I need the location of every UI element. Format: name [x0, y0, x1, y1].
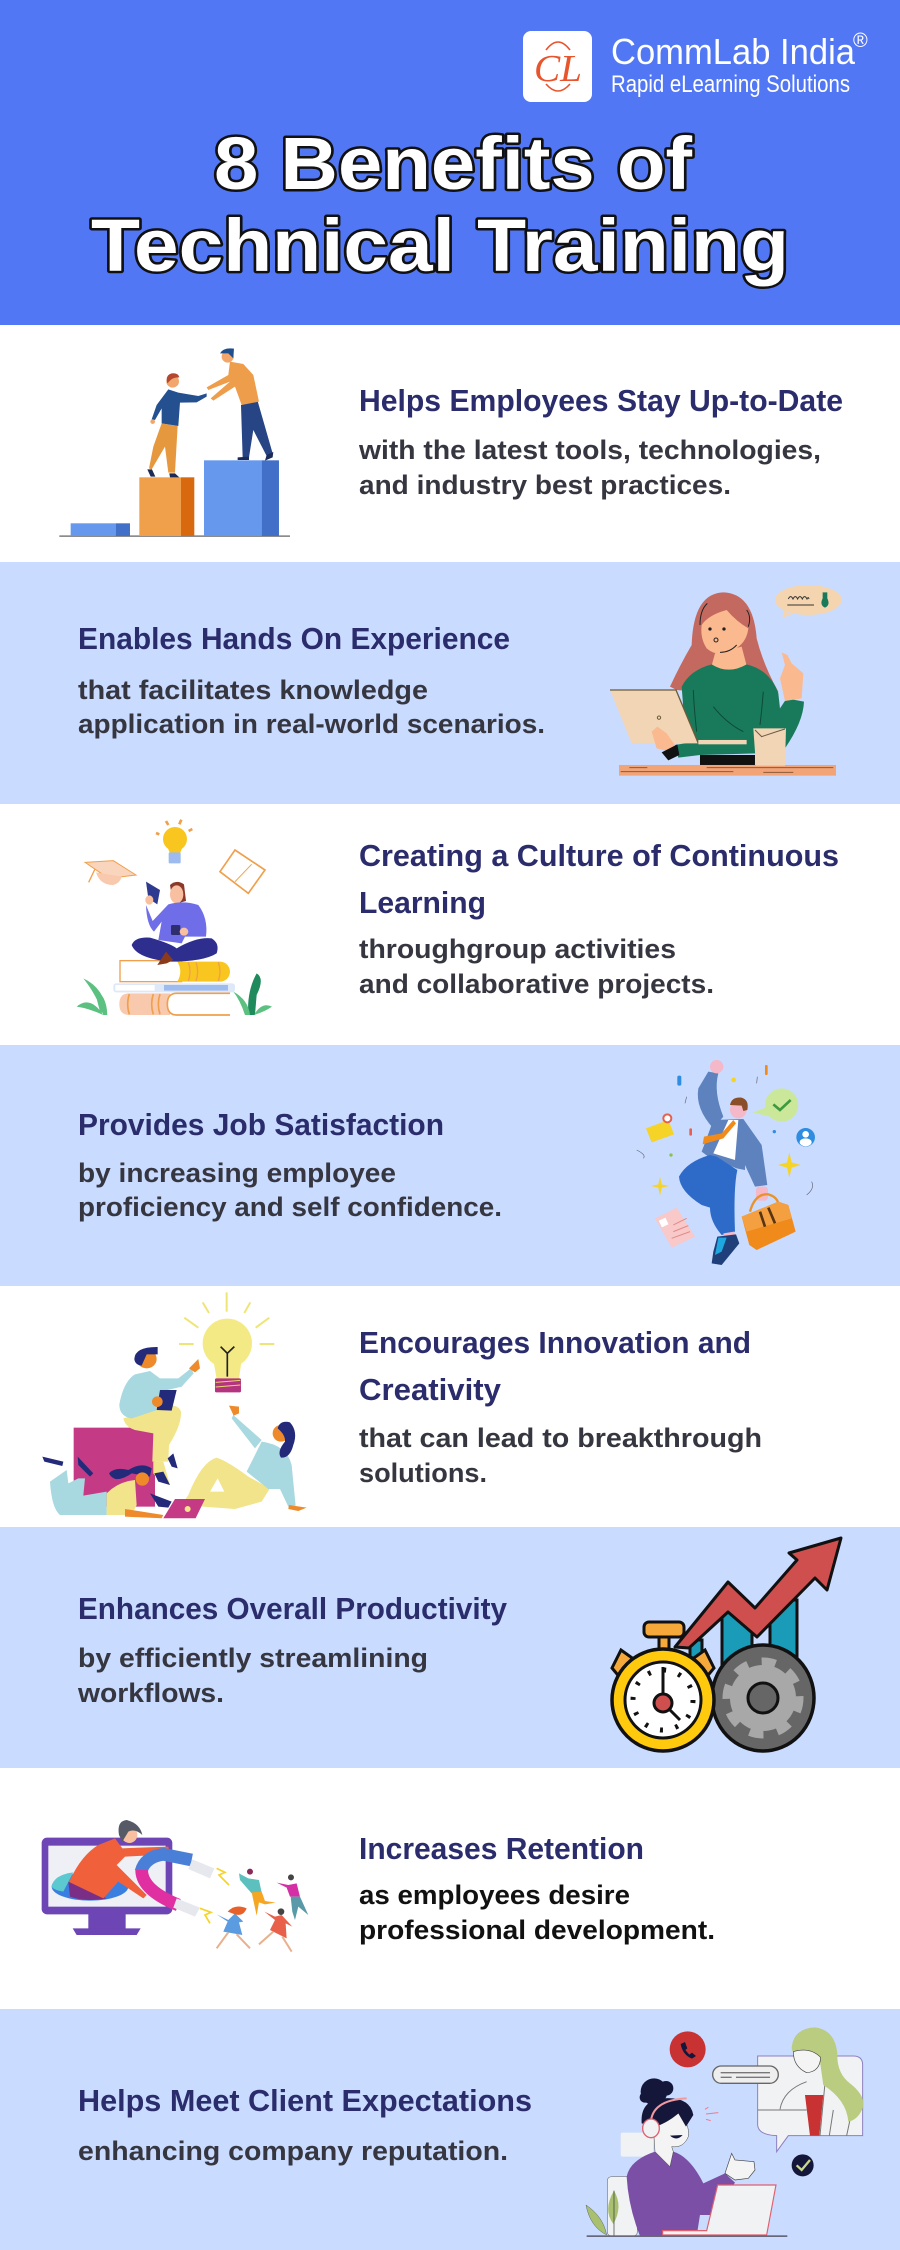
panel: hands on experience: [0, 562, 900, 804]
panel: overall productivity: [0, 1527, 900, 1768]
panel: client expectations: [0, 2009, 900, 2250]
logo: Rapid eLearning Solutions: [611, 71, 850, 98]
title: [91, 122, 789, 287]
illustration: woman reading on books: [77, 820, 272, 1015]
illustration: stopwatch, gear and rising arrow: [612, 1538, 841, 1751]
heading: Enhances Overall Productivity: [78, 1591, 508, 1626]
header panel: [0, 0, 900, 325]
body text: as employees desire: [359, 1880, 630, 1910]
body text: workflows.: [77, 1678, 224, 1708]
logo: CL: [534, 48, 582, 90]
title: 8 Benefits of: [214, 122, 692, 205]
body text: [359, 1880, 715, 1945]
panel: job satisfaction: [0, 1045, 900, 1286]
body text: enhancing company reputation.: [78, 2136, 508, 2166]
logo: CommLab India: [611, 31, 856, 72]
body text: [77, 1643, 428, 1708]
body text: [78, 1158, 502, 1222]
heading: Helps Employees Stay Up-to-Date: [359, 383, 843, 418]
panel: innovation and creativity: [0, 1286, 900, 1527]
panel: retention: [0, 1768, 900, 2009]
heading: Creating a Culture of Continuous: [359, 838, 839, 873]
heading: Encourages Innovation and: [359, 1325, 751, 1360]
body text: that facilitates knowledge: [78, 675, 428, 705]
title: Technical Training: [91, 204, 789, 287]
body text: that can lead to breakthrough: [359, 1423, 762, 1453]
illustration: customer support call: [586, 2027, 863, 2237]
body text: and collaborative projects.: [359, 969, 714, 999]
heading: Enables Hands On Experience: [78, 621, 510, 656]
body text: by efficiently streamlining: [78, 1643, 428, 1673]
heading: Increases Retention: [359, 1831, 644, 1866]
body text: [359, 1423, 762, 1488]
body text: [358, 435, 821, 500]
body text: and industry best practices.: [359, 470, 731, 500]
logo: [523, 30, 868, 102]
body text: application in real-world scenarios.: [78, 709, 545, 739]
heading: Provides Job Satisfaction: [78, 1107, 444, 1142]
body text: proficiency and self confidence.: [78, 1192, 502, 1222]
heading: Learning: [359, 885, 486, 920]
illustration: magnet attracting employees: [42, 1820, 308, 1952]
body text: throughgroup activities: [359, 934, 676, 964]
illustration: woman with laptop: [610, 585, 842, 776]
body text: solutions.: [359, 1458, 487, 1488]
logo: ®: [853, 30, 868, 52]
heading: Helps Meet Client Expectations: [78, 2083, 532, 2118]
panel: stay up-to-date: [0, 325, 900, 562]
heading: [359, 838, 839, 920]
body text: [78, 675, 545, 739]
heading: [359, 1325, 751, 1407]
body text: [359, 934, 714, 999]
heading: Creativity: [359, 1372, 502, 1407]
body text: with the latest tools, technologies,: [358, 435, 821, 465]
illustration: team around light bulb: [42, 1292, 307, 1518]
body text: by increasing employee: [78, 1158, 396, 1188]
body text: professional development.: [359, 1915, 715, 1945]
illustration: jumping businessman: [637, 1060, 815, 1265]
illustration: people on rising blocks: [59, 348, 290, 537]
panel: culture of continuous learning: [0, 804, 900, 1045]
